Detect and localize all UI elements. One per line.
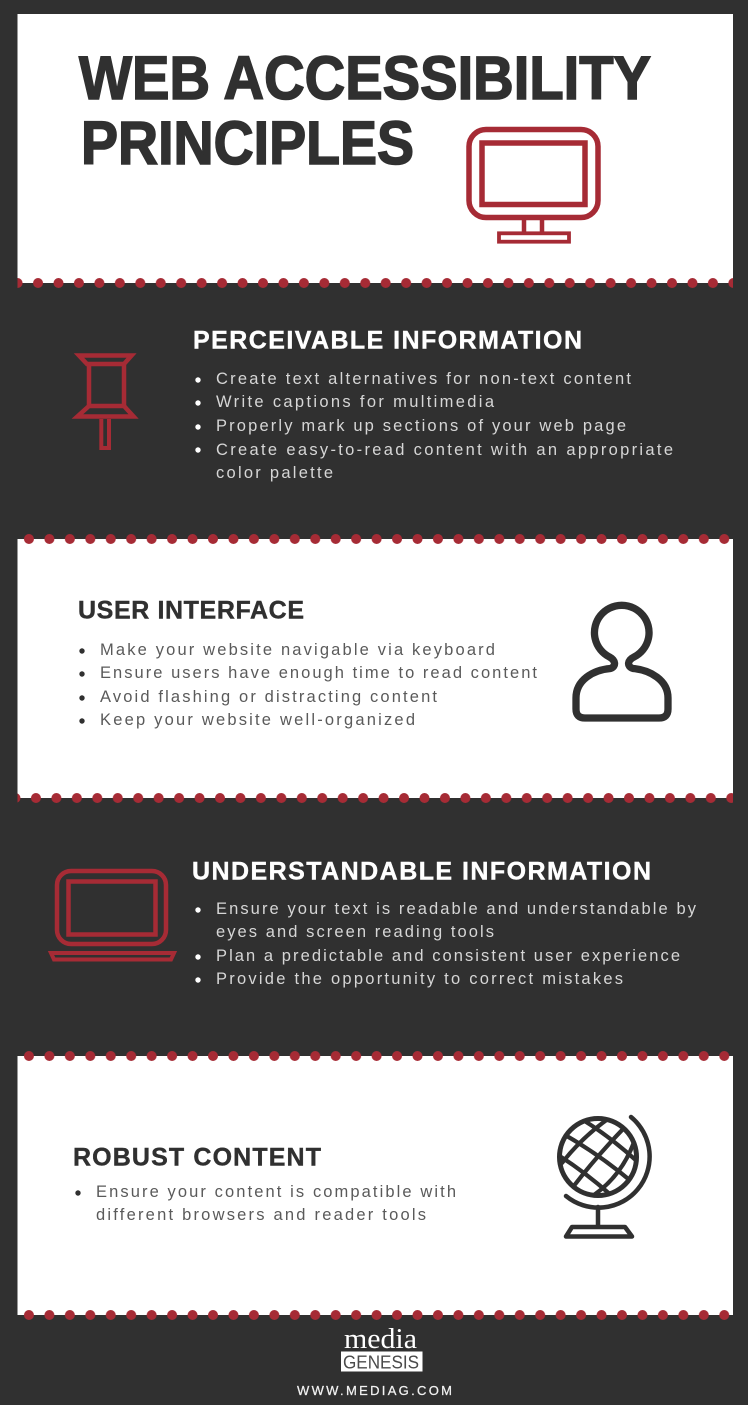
- list: user interface bullets: Keep your website well-organized: [100, 711, 415, 729]
- title: WEB ACCESSIBILITY: [79, 44, 651, 112]
- heading: understandable information: UNDERSTANDABLE INFORMATION: [192, 858, 651, 886]
- list: perceivable bullets: [195, 370, 673, 482]
- heading: robust content: ROBUST CONTENT: [73, 1144, 321, 1172]
- logo: media genesis: GENESIS: [343, 1351, 419, 1372]
- dotted edge: user interface bottom: [18, 792, 733, 804]
- list: understandable bullets: Ensure your text is readable and understandable by: [216, 900, 697, 918]
- logo: media genesis: [341, 1323, 422, 1372]
- list: understandable bullets: Plan a predictable and consistent user experience: [216, 947, 680, 965]
- panel: understandable information: [51, 858, 697, 988]
- list: user interface bullets: Avoid flashing or distracting content: [100, 688, 437, 706]
- dotted edge: robust bottom: [18, 1309, 733, 1321]
- list: perceivable bullets: Write captions for multimedia: [216, 393, 495, 411]
- list: perceivable bullets: Create text alternatives for non-text content: [216, 370, 631, 388]
- list: robust bullets: Ensure your content is compatible with: [96, 1183, 456, 1201]
- dotted edge: understandable top: [18, 1050, 733, 1062]
- list: perceivable bullets: Create easy-to-read content with an appropriate: [216, 441, 673, 459]
- panel: robust content: [18, 1056, 733, 1315]
- icon: desktop monitor: [469, 130, 598, 242]
- list: robust bullets: different browsers and reader tools: [96, 1206, 426, 1224]
- list: understandable bullets: Provide the opportunity to correct mistakes: [216, 970, 623, 988]
- icon: globe: [558, 1116, 650, 1236]
- panel: title: [18, 14, 733, 283]
- logo: media genesis: media: [344, 1323, 417, 1355]
- panel: user interface: [18, 539, 733, 798]
- list: perceivable bullets: Properly mark up sections of your web page: [216, 417, 626, 435]
- footer url: WWW.MEDIAG.COM: [297, 1383, 452, 1398]
- dotted edge: user interface top: [18, 533, 733, 545]
- icon: laptop: [51, 871, 174, 960]
- panel: perceivable information: [77, 326, 673, 482]
- list: robust bullets: [75, 1183, 456, 1224]
- list: user interface bullets: Make your website navigable via keyboard: [100, 641, 495, 659]
- dotted edge: title panel bottom: [18, 277, 733, 289]
- list: user interface bullets: [79, 641, 537, 729]
- icon: push pin: [77, 356, 134, 448]
- heading: perceivable information: PERCEIVABLE INFORMATION: [193, 326, 582, 354]
- list: understandable bullets: [195, 900, 697, 988]
- list: user interface bullets: Ensure users have enough time to read content: [100, 664, 537, 682]
- heading: user interface: USER INTERFACE: [78, 596, 304, 624]
- list: perceivable bullets: color palette: [216, 464, 333, 482]
- list: understandable bullets: eyes and screen reading tools: [216, 923, 494, 941]
- title: [79, 44, 651, 177]
- title: PRINCIPLES: [81, 109, 414, 177]
- icon: user: [576, 605, 668, 718]
